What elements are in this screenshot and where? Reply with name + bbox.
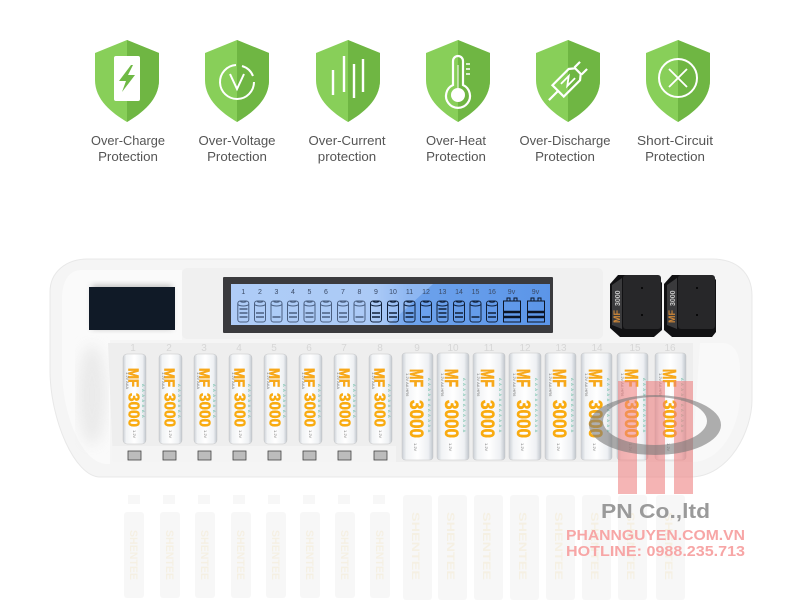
tray slot numbers: 2 [166,343,172,354]
AAA batteries 1-8: 1.2V AAA [336,372,341,389]
9V battery left: 3000 [615,290,622,306]
LCD slot numbers: 14 [455,289,463,296]
AA batteries 9-16: 1.2V [413,443,418,452]
AA batteries 9-16: AAAAAAAAAAA [462,378,467,435]
AA batteries 9-16: 1.2V [556,443,561,452]
AA batteries 9-16: MF [406,369,426,387]
AAA batteries 1-8: 3000 [230,393,248,427]
AAA batteries 1-8: AAAAAAA [352,384,357,420]
AA batteries 9-16: AAAAAAAAAAA [642,378,647,435]
AAA batteries 1-8: 1.2V AAA [231,372,236,389]
shield: short-circuit protection [646,40,710,122]
AA batteries 9-16: 3000 [584,400,605,438]
reflection of batteries: SHENTEE [127,530,139,580]
AA batteries 9-16: AAAAAAAAAAA [606,378,611,435]
watermark website: PHANNGUYEN.COM.VN [566,528,745,544]
AAA batteries 1-8: 1.2V AAA [161,372,166,389]
label: short-circuit: Short-Circuit [637,133,713,148]
AA batteries 9-16: MF [585,369,605,387]
shield: over-discharge protection [536,40,600,122]
9V battery right [664,275,716,337]
LCD slot numbers: 15 [472,289,479,296]
AAA batteries 1-8: 3000 [300,393,318,427]
reflection of batteries: SHENTEE [303,530,315,580]
watermark: PN Co.,Ltd logo [566,381,745,560]
LCD slot numbers: 11 [406,289,413,296]
AAA batteries 1-8: AAAAAAA [177,384,182,420]
reflection of batteries: SHENTEE [338,530,350,580]
AAA batteries 1-8: MF [160,368,178,387]
AA batteries 9-16: MF [477,369,497,387]
label: over-current: protection [318,149,376,164]
AA batteries 9-16: 3000 [620,400,641,438]
9V battery left [610,275,662,337]
AAA batteries 1-8: 3000 [266,393,282,427]
AA batteries 9-16: 1.2V AA HR6 [405,373,410,397]
reflection of batteries: SHENTEE [480,512,492,580]
9V battery right: 3000 [670,290,677,306]
reflection of batteries: SHENTEE [269,530,281,580]
label: over-current: Over-Current [308,133,386,148]
AAA batteries 1-8: 3000 [336,393,352,427]
AAA batteries 1-8: MF [266,368,282,387]
AA batteries 9-16 [402,353,686,460]
LCD slot numbers: 16 [488,289,496,296]
raised display panel [182,268,603,339]
label: over-heat [426,133,486,164]
AA batteries 9-16: AAAAAAAAAAA [570,378,575,435]
label: over-current [308,133,386,164]
label: over-heat: Protection [426,149,486,164]
label: over-charge [91,133,165,164]
AAA batteries 1-8: AAAAAAA [247,384,252,420]
AAA batteries 1-8: 3000 [196,393,212,427]
reflection of batteries: SHENTEE [444,512,456,580]
LCD slot numbers: 12 [422,289,430,296]
shield: over-charge protection [95,40,159,122]
tray slot numbers: 13 [555,343,567,354]
AAA batteries 1-8: 1.2V [308,430,313,439]
AA batteries 9-16: 1.2V AA HR6 [476,373,481,397]
AAA batteries 1-8: 1.2V [168,430,173,439]
AAA batteries 1-8: 1.2V AAA [266,372,271,389]
AA batteries 9-16: 1.2V AA HR6 [548,373,553,397]
AA batteries 9-16: 1.2V [520,443,525,452]
watermark company name: PN Co.,ltd [601,501,710,523]
AA batteries 9-16: AAAAAAAAAAA [427,378,432,435]
reflection of batteries: SHENTEE [409,512,421,580]
label: over-charge: Over-Charge [91,133,165,148]
reflection of batteries: SHENTEE [662,512,674,580]
LCD slot numbers: 7 [341,289,345,296]
tray slot numbers [130,343,676,354]
AAA batteries 1-8: AAAAAAA [141,384,146,420]
AAA batteries 1-8: MF [370,368,388,387]
watermark hotline: HOTLINE: 0988.235.713 [566,544,745,560]
LCD slot numbers [241,289,540,296]
AA batteries 9-16: 1.2V AA HR6 [584,373,589,397]
LCD status display [223,277,553,333]
LCD slot numbers: 9 [374,289,378,296]
battery tray [108,343,693,462]
label: over-heat: Over-Heat [426,133,486,148]
LCD slot numbers: 13 [439,289,446,296]
label: over-charge: Protection [98,149,158,164]
LCD battery level icons: 1-8 [238,301,365,322]
AAA batteries 1-8 [123,354,392,444]
LCD slot numbers: 3 [275,289,279,296]
LCD slot numbers: 1 [241,289,245,296]
LCD slot numbers: 8 [358,289,362,296]
AA batteries 9-16: MF [513,369,533,387]
label: over-discharge: Protection [535,149,595,164]
LCD slot numbers: 4 [291,289,295,296]
label: short-circuit: Protection [645,149,705,164]
AAA batteries 1-8: 1.2V [203,430,208,439]
AAA batteries 1-8: AAAAAAA [282,384,287,420]
LCD slot numbers: 6 [324,289,328,296]
AA batteries 9-16: 3000 [512,400,533,438]
AAA batteries 1-8: MF [336,368,352,387]
shield: over-current protection [316,40,380,122]
LCD slot numbers: 9v [532,289,540,296]
AAA batteries 1-8: AAAAAAA [387,384,392,420]
AA batteries 9-16: 1.2V [666,443,671,452]
tray slot numbers: 11 [484,343,495,354]
shield: over-voltage protection [205,40,269,122]
watermark red bars [618,381,693,494]
AA batteries 9-16: AAAAAAAAAAA [680,378,685,435]
LCD slot numbers: 5 [308,289,312,296]
AAA batteries 1-8: 1.2V AAA [301,372,306,389]
watermark grey ring [589,395,721,455]
reflection of batteries: SHENTEE [552,512,564,580]
AAA batteries 1-8: 3000 [370,393,388,427]
reflection of batteries: SHENTEE [234,530,246,580]
AA batteries 9-16: AAAAAAAAAAA [534,378,539,435]
AA batteries 9-16: 3000 [476,400,497,438]
tray slot numbers: 1 [130,343,136,354]
protection shield row [91,40,713,164]
tray slot numbers: 15 [629,343,641,354]
AA batteries 9-16: 1.2V [448,443,453,452]
AAA batteries 1-8: AAAAAAA [317,384,322,420]
LCD slot numbers: 9v [508,289,516,296]
label: short-circuit [637,133,713,164]
AA batteries 9-16: 3000 [658,400,679,438]
AA batteries 9-16: MF [659,369,679,387]
LCD battery level icons: 9-16 [370,301,498,322]
label: over-voltage: Over-Voltage [198,133,276,148]
tray slot numbers: 5 [271,343,277,354]
charger body [50,259,752,477]
LCD slot numbers: 2 [258,289,262,296]
tray slot numbers: 7 [341,343,347,354]
AAA batteries 1-8: 1.2V [378,430,383,439]
tray slot numbers: 6 [306,343,312,354]
AAA batteries 1-8: MF [124,368,142,387]
reflection of batteries: SHENTEE [624,512,636,580]
label: over-voltage [198,133,276,164]
AAA batteries 1-8: 1.2V AAA [196,372,201,389]
AA batteries 9-16: MF [549,369,569,387]
label: over-discharge: Over-Discharge [520,133,610,148]
LCD 9V battery icons [504,298,544,322]
AAA batteries 1-8: 1.2V [132,430,137,439]
AA batteries 9-16: 1.2V AA HR6 [658,373,663,397]
reflection of batteries: SHENTEE [516,512,528,580]
label: over-voltage: Protection [207,149,267,164]
AAA batteries 1-8: 1.2V [273,430,278,439]
AAA batteries 1-8: MF [230,368,248,387]
tray slot numbers: 10 [447,343,459,354]
AA batteries 9-16: 1.2V AA HR6 [440,373,445,397]
reflection of batteries: SHENTEE [163,530,175,580]
LCD slot numbers: 10 [389,289,397,296]
AA batteries 9-16: 3000 [548,400,569,438]
reflection of batteries: SHENTEE [198,530,210,580]
AAA batteries 1-8: 3000 [160,393,178,427]
AA batteries 9-16: 3000 [440,400,461,438]
tray slot numbers: 9 [414,343,420,354]
tray slot numbers: 16 [664,343,676,354]
AAA batteries 1-8: 1.2V AAA [125,372,130,389]
AAA batteries 1-8: 1.2V [343,430,348,439]
AAA batteries 1-8: MF [300,368,318,387]
reflection of batteries [124,495,685,600]
label: over-discharge [520,133,610,164]
9V batteries in top right bay [610,275,716,337]
AA batteries 9-16: 1.2V AA HR6 [512,373,517,397]
reflection of batteries: SHENTEE [588,512,600,580]
9V battery left: MF [612,310,622,323]
AA batteries 9-16: 1.2V [592,443,597,452]
AAA batteries 1-8: 1.2V AAA [371,372,376,389]
shield: over-heat protection [426,40,490,122]
AA batteries 9-16: AAAAAAAAAAA [498,378,503,435]
AA batteries 9-16: 1.2V [628,443,633,452]
tray slot numbers: 8 [377,343,383,354]
AAA batteries 1-8: 3000 [124,393,142,427]
tray slot numbers: 12 [519,343,531,354]
tray slot numbers: 14 [591,343,603,354]
tray slot numbers: 3 [201,343,207,354]
AA batteries 9-16: 1.2V AA HR6 [620,373,625,397]
AA batteries 9-16: MF [441,369,461,387]
AA batteries 9-16: 3000 [405,400,426,438]
left black display window [89,285,175,330]
reflection of batteries: SHENTEE [373,530,385,580]
AAA batteries 1-8: 1.2V [238,430,243,439]
spring contacts [128,451,387,460]
AAA batteries 1-8: AAAAAAA [212,384,217,420]
tray slot numbers: 4 [236,343,242,354]
AA batteries 9-16: MF [621,369,641,387]
AAA batteries 1-8: MF [196,368,212,387]
AA batteries 9-16: 1.2V [484,443,489,452]
9V battery right: MF [667,310,677,323]
